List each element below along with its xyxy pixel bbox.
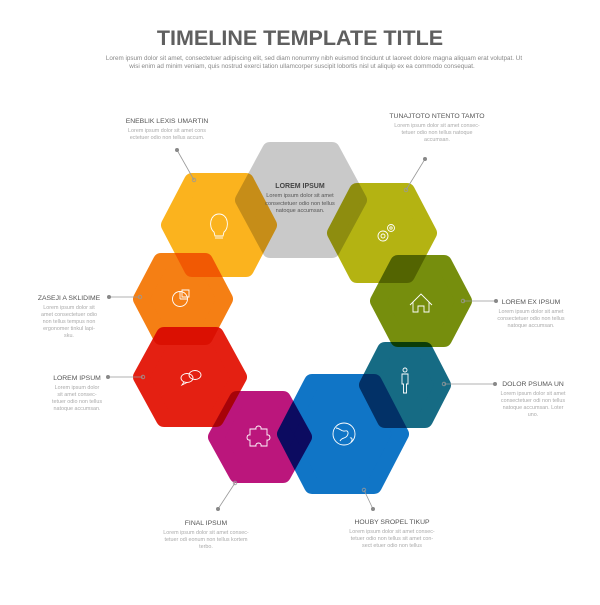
subtitle <box>106 55 522 70</box>
hex: gray center <box>243 150 359 250</box>
label: lorem ex ipsum: LOREM EX IPSUM <box>502 299 561 306</box>
label: final ipsum: terbo. <box>199 544 213 550</box>
label: dolor psuma: DOLOR PSUMA UN <box>502 381 564 388</box>
label: tunajtoto: accumsan. <box>424 137 450 143</box>
label: final ipsum: tetuer odi eonum non tellus kortem <box>164 537 248 543</box>
label: final ipsum: Lorem ipsum dolor sit amet consec- <box>163 530 249 536</box>
label: final ipsum <box>163 520 249 550</box>
hex: teal <box>367 350 443 420</box>
icon: person <box>402 368 408 393</box>
hexagon ring <box>141 150 464 486</box>
hex: red <box>141 335 239 419</box>
label: zaseji: ZASEJI A SKLIDIME <box>38 295 101 302</box>
label: dolor psuma: natoque accumsan. Loter <box>503 405 564 411</box>
label: tunajtoto: TUNAJTOTO NTENTO TAMTO <box>389 113 485 120</box>
hex: blue <box>285 382 401 486</box>
label: tunajtoto: tetuer odio non tellus natoque <box>401 130 473 136</box>
label: dolor psuma: consectetuer odi non tellus <box>501 398 565 404</box>
center text block: Lorem ipsum dolor sit amet <box>266 193 334 199</box>
label: lorem ipsum left: sit amet consec- <box>57 392 97 398</box>
label: lorem ex ipsum: Lorem ipsum dolor sit amet <box>498 309 564 315</box>
connectors <box>108 150 496 509</box>
label: lorem ipsum left: LOREM IPSUM <box>53 375 101 382</box>
label: dolor psuma <box>500 381 566 418</box>
label: dolor psuma: Lorem ipsum dolor sit amet <box>500 391 566 397</box>
icons <box>172 214 432 446</box>
label: lorem ipsum left: natoque accumsan. <box>53 406 101 412</box>
label: eneblik <box>126 118 208 141</box>
label: eneblik: ectetuer odio non tellus accum. <box>130 135 204 141</box>
label: dolor psuma: uno. <box>528 412 538 418</box>
label: zaseji: ergonomer tinkul lapi- <box>43 326 95 332</box>
icon: bulb <box>211 214 227 238</box>
label: final ipsum: FINAL IPSUM <box>185 520 228 527</box>
icon: globe <box>333 423 355 445</box>
hex: green <box>378 263 464 339</box>
hex: olive <box>335 191 429 275</box>
center text block: consectetuer odio non tellus <box>265 201 335 207</box>
label: houby: Lorem ipsum dolor sit amet consec- <box>349 529 435 535</box>
label: houby <box>349 519 435 549</box>
label: houby: tetuer odio non tellus sit amet con- <box>351 536 433 542</box>
label: zaseji: Lorem ipsum dolor sit <box>43 305 95 311</box>
label: lorem ex ipsum <box>497 299 565 329</box>
label: houby: sect etuer odio non tellus <box>362 543 422 549</box>
label: zaseji <box>38 295 101 339</box>
icon: puzzle <box>247 426 270 446</box>
hex: magenta <box>216 399 304 475</box>
label: zaseji: amet consectetuer odio <box>41 312 97 318</box>
label: lorem ipsum left: Lorem ipsum dolor <box>55 385 100 391</box>
label: houby: HOUBY SROPEL TIKUP <box>354 519 430 526</box>
icon: house <box>410 294 432 312</box>
title: TIMELINE TEMPLATE TITLE <box>157 26 443 50</box>
icon: pie chart <box>172 290 189 306</box>
center text block: natoque accumsan. <box>276 208 325 214</box>
hex: yellow <box>169 181 269 269</box>
label: zaseji: non tellus tempus non <box>43 319 95 325</box>
label: zaseji: sku. <box>64 333 74 339</box>
center text block: LOREM IPSUM <box>275 183 325 190</box>
label: lorem ex ipsum: consectetuer odio non tellus <box>497 316 565 322</box>
hex: orange <box>141 261 225 337</box>
icon: speech bubbles <box>181 370 201 385</box>
icon: gears <box>378 224 394 241</box>
subtitle: Lorem ipsum dolor sit amet, consectetuer adipiscing elit, sed diam nonummy nibh euismod tincidunt ut laoreet dolore magna aliquam erat volutpat. Ut <box>106 55 522 62</box>
center text block <box>265 183 335 214</box>
label: lorem ipsum left: tetuer odio non tellus <box>52 399 102 405</box>
label: eneblik: Lorem ipsum dolor sit amet cons <box>128 128 206 134</box>
label: lorem ipsum left <box>52 375 102 412</box>
subtitle: wisi enim ad minim veniam, quis nostrud exerci tation ullamcorper suscipit lobortis nisl ut aliquip ex ea commodo consequat. <box>128 63 475 70</box>
label: tunajtoto: Lorem ipsum dolor sit amet consec- <box>394 123 480 129</box>
label: tunajtoto <box>389 113 485 143</box>
label: lorem ex ipsum: natoque accumsan. <box>507 323 555 329</box>
label: eneblik: ENEBLIK LEXIS UMARTIN <box>126 118 208 125</box>
